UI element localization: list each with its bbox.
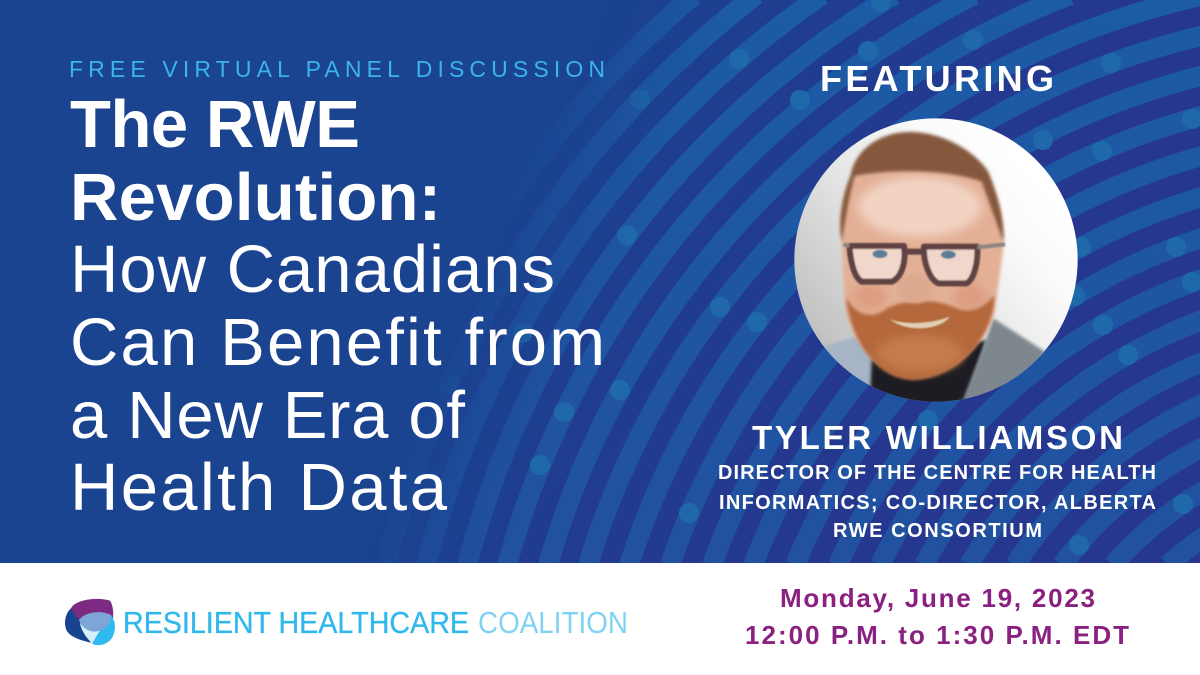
subtitle line 1: How Canadians	[70, 232, 555, 307]
hair	[840, 132, 1003, 242]
speaker role	[718, 462, 1156, 542]
date: Monday, June 19, 2023	[780, 583, 1095, 613]
jacket left	[824, 336, 877, 389]
beard	[846, 295, 994, 380]
title bold line 2: Revolution:	[70, 160, 441, 235]
logo mark	[65, 599, 115, 645]
head	[841, 167, 1004, 378]
subtitle line 4: Health Data	[70, 450, 448, 525]
logo: Resilient Healthcare Coalition	[65, 599, 628, 645]
subtitle line 2: Can Benefit from	[70, 305, 605, 380]
panel: white footer	[0, 563, 1200, 675]
mouth	[890, 317, 950, 328]
jacket right	[962, 318, 1045, 403]
role line 3: RWE CONSORTIUM	[833, 520, 1042, 542]
title	[70, 87, 605, 525]
glasses	[843, 244, 1005, 283]
eyes	[873, 250, 956, 259]
left fade over arcs	[336, 0, 676, 563]
role line 1: DIRECTOR OF THE CENTRE FOR HEALTH	[718, 462, 1156, 484]
featuring heading: FEATURING	[820, 58, 1054, 99]
cheek left	[853, 283, 887, 310]
arc node dots	[439, 0, 1200, 555]
speaker name: TYLER WILLIAMSON	[752, 419, 1123, 456]
logo wordmark bold: RESILIENT HEALTHCARE	[123, 605, 469, 640]
forehead highlight	[858, 177, 982, 237]
beard shading	[877, 335, 963, 372]
role line 2: INFORMATICS; CO-DIRECTOR, ALBERTA	[719, 492, 1156, 514]
subtitle line 3: a New Era of	[70, 378, 465, 453]
shirt	[870, 340, 987, 407]
title bold line 1: The RWE	[70, 87, 360, 162]
event date and time	[745, 583, 1129, 650]
cheek right	[953, 283, 987, 310]
nose	[905, 300, 927, 306]
eyebrow text: FREE VIRTUAL PANEL DISCUSSION	[69, 56, 605, 82]
logo wordmark light: COALITION	[478, 605, 628, 640]
time: 12:00 P.M. to 1:30 P.M. EDT	[745, 620, 1129, 650]
speaker portrait	[793, 117, 1080, 407]
concentric arc pattern	[346, 0, 1200, 565]
